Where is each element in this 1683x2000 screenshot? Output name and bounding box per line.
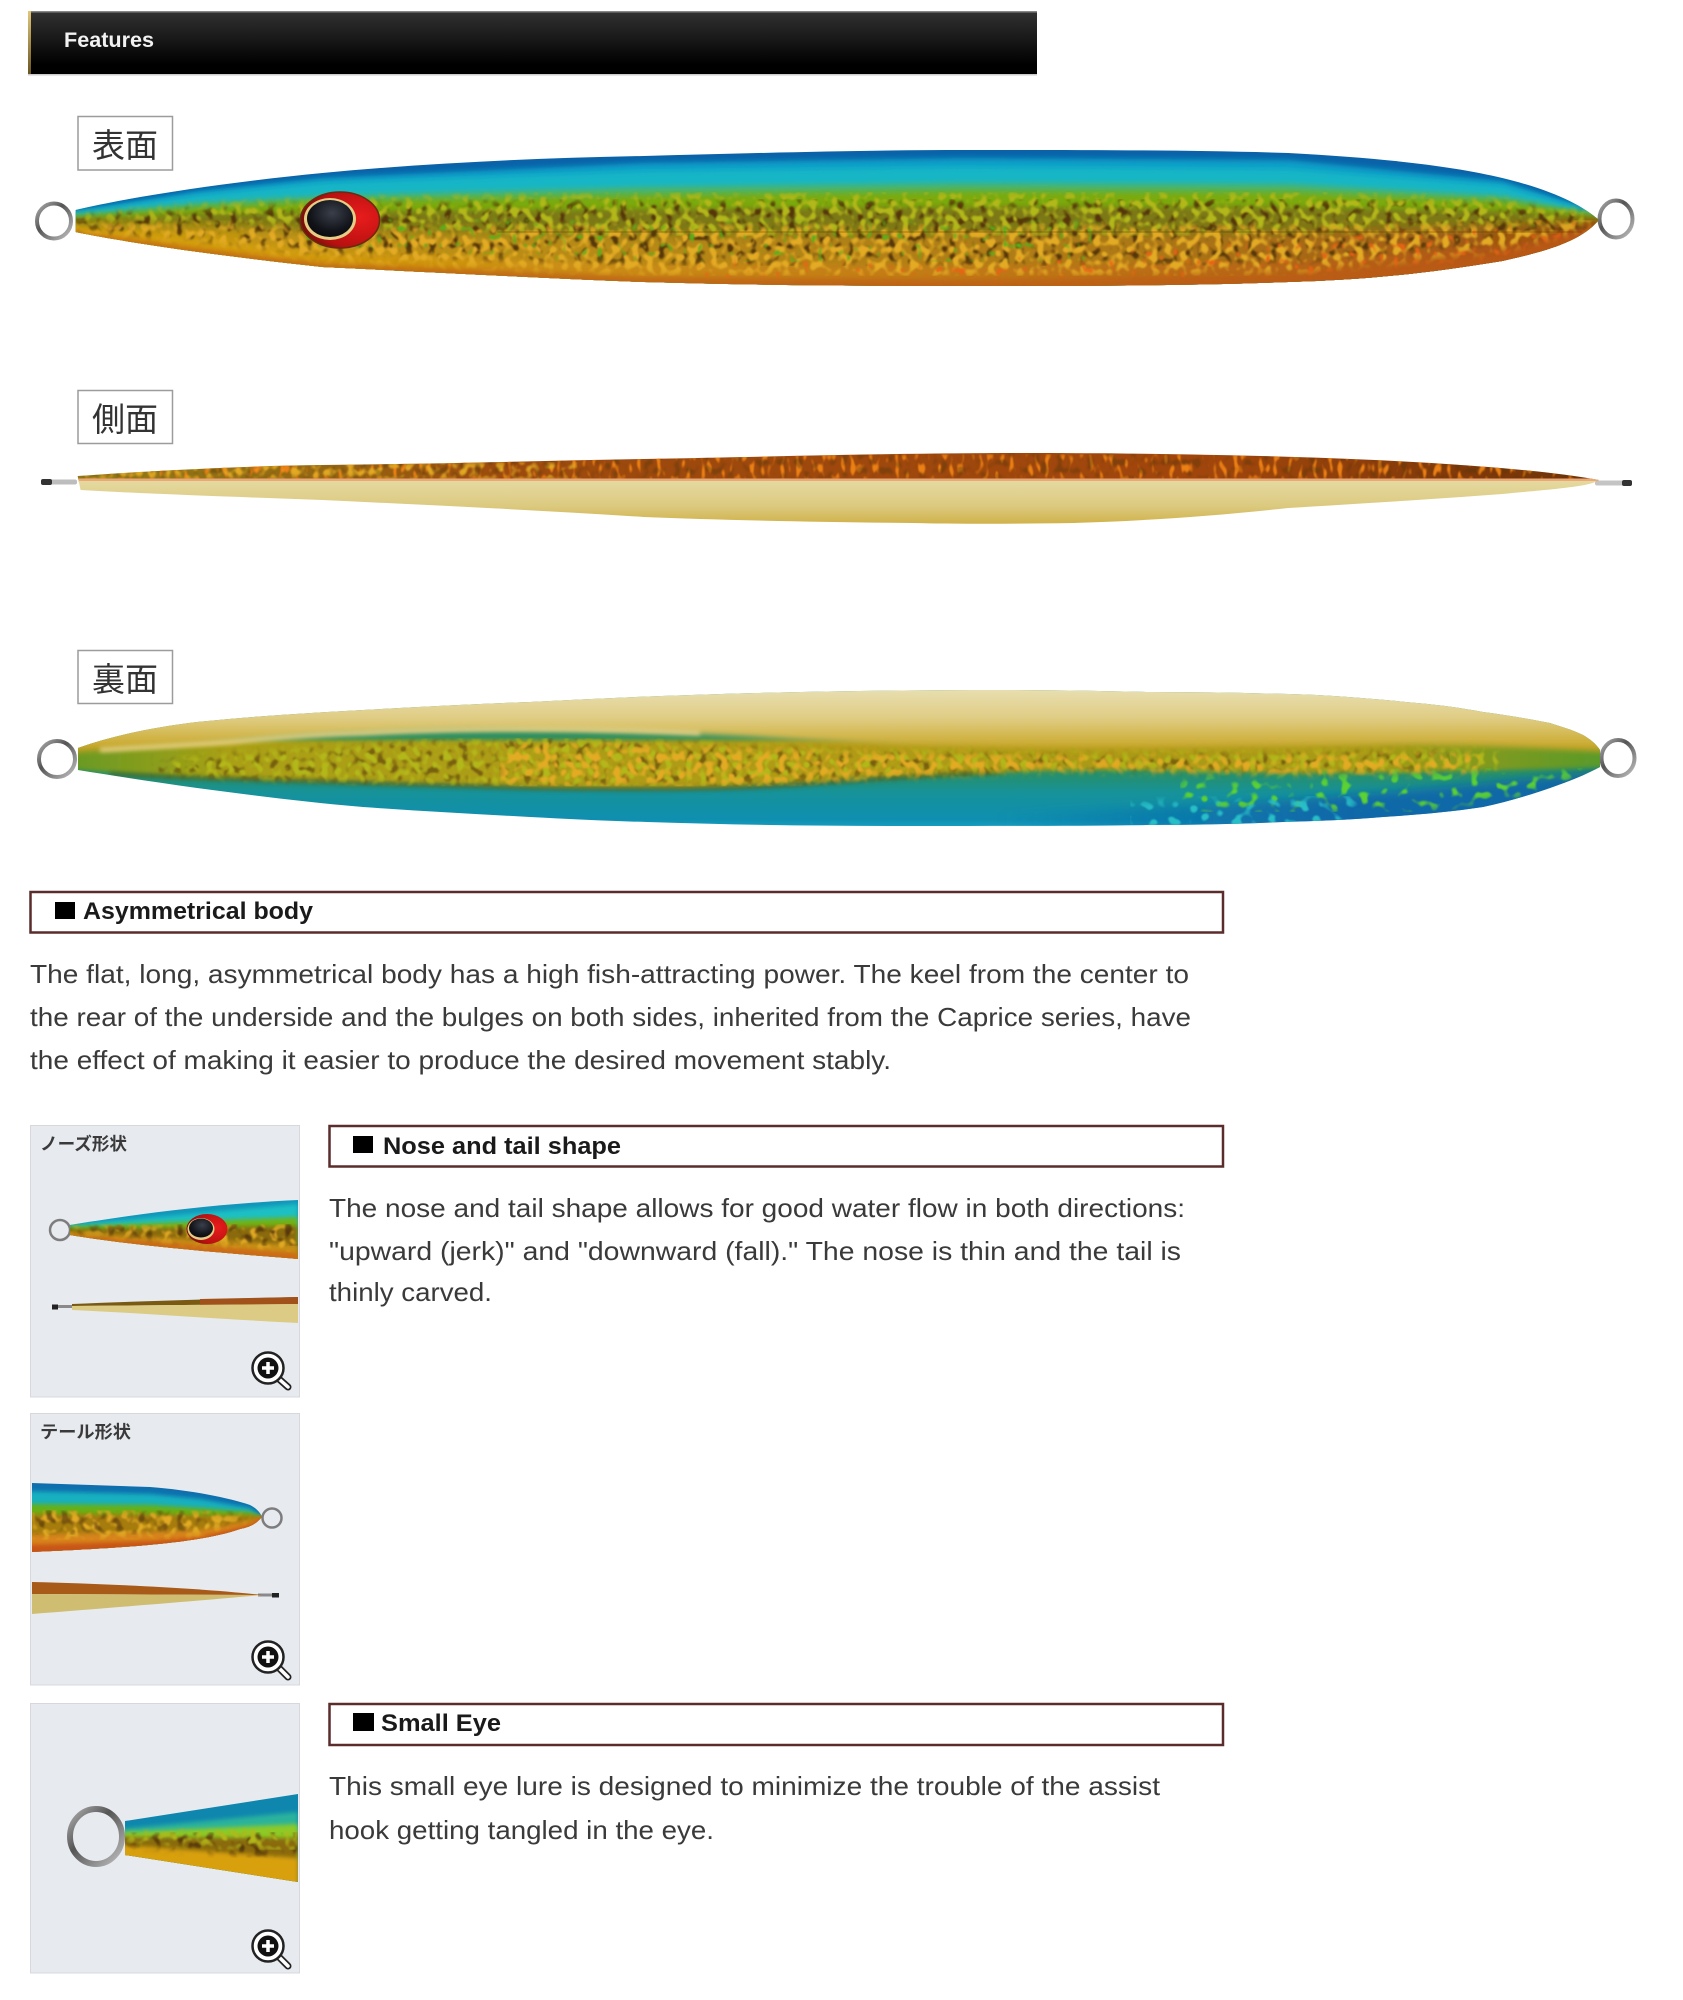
section: Small Eye [329,1704,1223,1845]
heading box [30,892,1223,932]
lure body: back [78,690,1600,826]
ring: tail [1602,740,1634,776]
body text: thinly carved. [329,1277,492,1307]
nose side [52,1297,298,1323]
heading box [330,1704,1223,1745]
lure: side view [41,450,1632,527]
flecks: lime [76,192,1599,236]
label: 表面 (front) [78,116,172,170]
lure body: side [70,450,1607,527]
section: Asymmetrical body [30,892,1223,1075]
lure: front view [35,150,1634,286]
icon: magnifier [252,1642,288,1677]
lure: back view [37,690,1636,826]
heading box: Small Eye [381,1710,501,1737]
keel line [497,231,1582,233]
body text: hook getting tangled in the eye. [329,1815,714,1845]
label: 表面 (front): 表面 [92,127,158,164]
label: 側面 (side) [78,390,172,444]
body text: This small eye lure is designed to minimize the trouble of the assist [329,1771,1161,1801]
heading box [330,1126,1223,1166]
heading box: Asymmetrical body [83,898,314,925]
ring [50,1220,70,1240]
eye [300,192,380,248]
ring: tail [1600,200,1632,238]
flecks: cyan [1130,796,1358,825]
thumbnail: tail shape [20,1414,300,1685]
nose front [70,1200,298,1259]
flecks: gold [76,220,1599,276]
flecks: dark holographic scales [76,199,1599,266]
tail side [32,1582,279,1614]
header bar: Features [28,11,1037,76]
thumbnail: nose shape [30,1126,300,1397]
body text [329,1771,1161,1845]
lure body: front [76,150,1599,286]
label: 裏面 (back): 裏面 [92,661,158,698]
body text: The nose and tail shape allows for good water flow in both directions: [329,1193,1185,1223]
dark edge under band [110,772,1000,789]
blue belly toward tail [1054,767,1600,826]
heading box: Nose and tail shape [383,1133,621,1160]
pin: tail [1595,480,1632,486]
flecks: orange [696,220,1599,278]
ring [262,1508,282,1528]
flecks: holographic band [150,738,1450,786]
caption: テール形状 [40,1422,132,1442]
body text [30,959,1191,1075]
label: 裏面 (back) [78,650,172,704]
ring: nose [39,741,75,777]
flecks: copper and gold [80,454,1602,479]
nose close-up [125,1794,298,1882]
body text: "upward (jerk)" and "downward (fall)." The nose is thin and the tail is [329,1236,1181,1266]
section: Nose and tail shape [329,1126,1223,1307]
holographic band base [60,740,1640,788]
body text [329,1193,1185,1307]
highlight along keel [100,729,700,750]
thumbnail: small eye [30,1704,300,1973]
flecks: green [298,215,1094,262]
ring [70,1809,122,1864]
icon: magnifier [252,1930,288,1966]
eye [186,1214,228,1244]
caption: ノーズ形状 [40,1134,128,1154]
icon: magnifier [252,1352,288,1387]
ring: nose [37,204,71,238]
pin: nose [41,479,77,485]
cream upper surface [78,690,1600,756]
tail front [32,1483,262,1552]
body text: The flat, long, asymmetrical body has a high fish-attracting power. The keel from the center to [30,959,1189,989]
body text: the effect of making it easier to produce the desired movement stably. [30,1045,891,1075]
header bar: Features: Features [64,28,154,52]
body text: the rear of the underside and the bulges on both sides, inherited from the Caprice series, have [30,1002,1191,1032]
label: 側面 (side): 側面 [92,401,158,438]
flecks: bright green [1180,768,1590,812]
